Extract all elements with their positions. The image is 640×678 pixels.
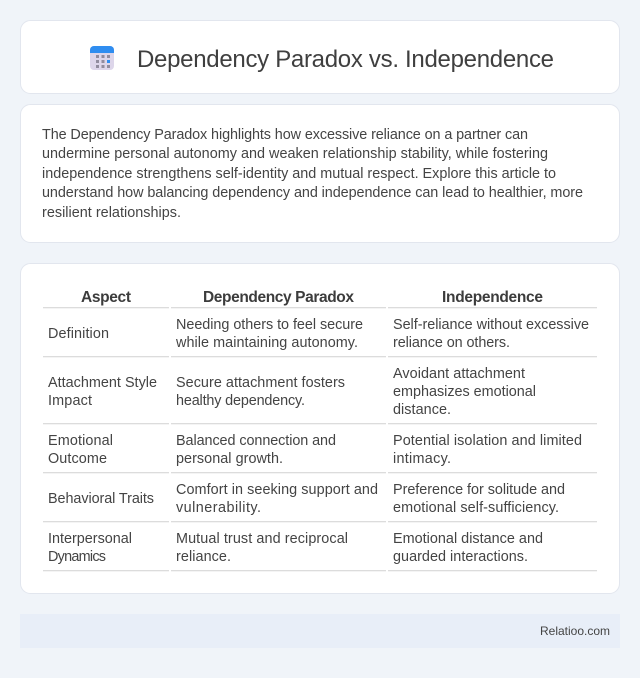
row: attachment style impact: Secure attachment fosters — [176, 375, 345, 391]
text block: introduction: understand how balancing dependency and independence can lead to healthier, more — [42, 185, 583, 201]
text block: introduction: The Dependency Paradox highlights how excessive reliance on a partner can — [42, 127, 528, 143]
row: behavioral traits: emotional self-sufficiency. — [393, 500, 559, 516]
row: attachment style impact — [48, 366, 536, 418]
text block: introduction: independence strengthens self-identity and mutual respect. Explore this article to — [42, 166, 556, 182]
row: emotional outcome: Potential isolation and limited — [393, 433, 582, 449]
footer — [20, 614, 620, 648]
row: definition: Self-reliance without excessive — [393, 317, 589, 333]
row: definition: while maintaining autonomy. — [175, 335, 358, 351]
row: definition: Definition — [48, 326, 109, 342]
row: attachment style impact: Impact — [48, 393, 92, 409]
row: interpersonal dynamics: Emotional distance and — [393, 531, 543, 547]
row: interpersonal dynamics — [48, 531, 543, 565]
row: behavioral traits — [48, 482, 565, 516]
row: emotional outcome — [48, 433, 582, 467]
row: emotional outcome: intimacy. — [393, 451, 451, 467]
row: interpersonal dynamics: reliance. — [176, 549, 231, 565]
row: definition — [48, 317, 589, 351]
icon: calendar — [90, 46, 114, 70]
table header: Independence — [442, 289, 543, 306]
row: attachment style impact: distance. — [393, 402, 451, 418]
row: interpersonal dynamics: Dynamics — [48, 549, 106, 565]
row: emotional outcome: personal growth. — [176, 451, 283, 467]
row: emotional outcome: Outcome — [48, 451, 107, 467]
row: behavioral traits: Comfort in seeking support and — [176, 482, 378, 498]
row: behavioral traits: Preference for solitude and — [393, 482, 565, 498]
row: emotional outcome: Balanced connection and — [176, 433, 336, 449]
row: emotional outcome: Emotional — [48, 433, 113, 449]
row: definition: Needing others to feel secure — [176, 317, 363, 333]
panel: introduction — [20, 104, 620, 242]
row: definition: reliance on others. — [393, 335, 510, 351]
text block: introduction: undermine personal autonomy and weaken relationship stability, while fostering — [42, 146, 548, 162]
row: attachment style impact: emphasizes emotional — [393, 384, 536, 400]
row: interpersonal dynamics: guarded interactions. — [393, 549, 528, 565]
row: interpersonal dynamics: Interpersonal — [48, 531, 132, 547]
title: Dependency Paradox vs. Independence — [137, 46, 554, 73]
text block: introduction — [42, 127, 583, 221]
text block: introduction: resilient relationships. — [42, 205, 181, 221]
row: interpersonal dynamics: Mutual trust and reciprocal — [176, 531, 348, 547]
table header: Dependency Paradox — [203, 289, 354, 306]
table header — [81, 289, 543, 306]
row: behavioral traits: Behavioral Traits — [48, 491, 154, 507]
panel: title card — [20, 20, 620, 94]
row: attachment style impact: Avoidant attachment — [393, 366, 525, 382]
row: attachment style impact: Attachment Style — [48, 375, 157, 391]
footer: Relatioo.com — [540, 624, 610, 638]
table header: Aspect — [81, 289, 131, 306]
panel: comparison table — [20, 264, 620, 594]
row: attachment style impact: healthy dependency. — [176, 393, 305, 409]
row: behavioral traits: vulnerability. — [176, 500, 261, 516]
